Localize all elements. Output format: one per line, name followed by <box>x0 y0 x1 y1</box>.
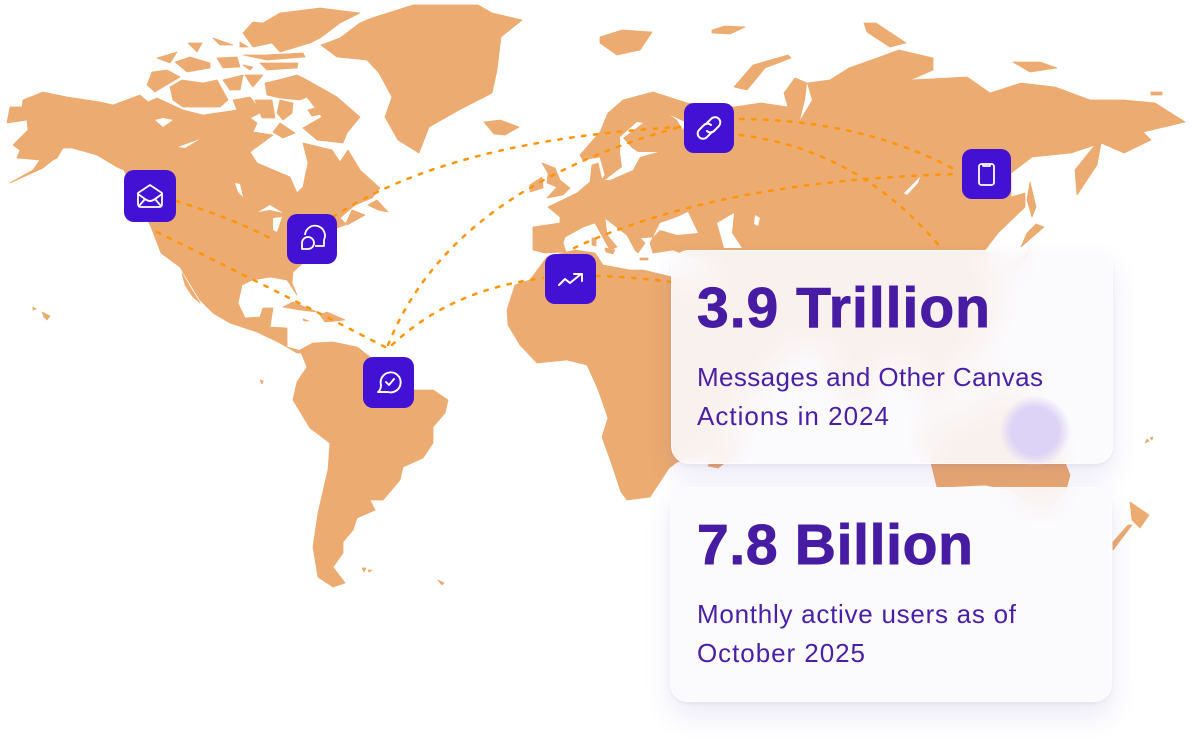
headline number: 7.8 Billion <box>697 513 973 577</box>
Sakhalin and Japan <box>1000 182 1044 272</box>
description: Messages and Other Canvas <box>697 362 1043 392</box>
icon: mobile phone <box>962 149 1011 199</box>
Madagascar <box>708 425 740 468</box>
icon: open envelope <box>124 170 176 222</box>
description: Monthly active users as of <box>697 599 1017 629</box>
Australia <box>925 385 1070 510</box>
Caribbean and small islands <box>33 302 1153 585</box>
stat card: 7.8 Billion <box>670 487 1112 702</box>
headline number: 3.9 Trillion <box>697 276 990 340</box>
Mediterranean islands <box>592 238 648 260</box>
New Zealand <box>1113 502 1149 550</box>
dashed connection routes <box>157 119 960 347</box>
icon: trend arrow <box>545 254 596 304</box>
icon: chain link <box>684 103 734 153</box>
North America <box>7 92 380 353</box>
map landmasses <box>7 5 1185 587</box>
description <box>697 362 1043 431</box>
northern Eurasian islands <box>600 23 1162 95</box>
South America <box>293 342 448 587</box>
Eurasia <box>533 50 1185 420</box>
Arctic islands <box>147 8 360 143</box>
description: Actions in 2024 <box>697 401 889 431</box>
icon: message check <box>363 357 414 408</box>
description: October 2025 <box>697 638 865 668</box>
stat card: 3.9 Trillion <box>671 250 1113 464</box>
icon: chat bubbles <box>287 214 337 264</box>
blurred purple spot <box>1000 396 1070 466</box>
UK and Ireland <box>530 163 570 198</box>
Africa <box>507 250 775 500</box>
Southeast Asia and Pacific islands <box>920 365 1060 457</box>
Greenland <box>321 5 522 153</box>
Newfoundland and Baja <box>182 190 388 303</box>
Iceland <box>484 120 519 135</box>
seas and lakes <box>155 83 920 248</box>
description <box>697 599 1017 668</box>
